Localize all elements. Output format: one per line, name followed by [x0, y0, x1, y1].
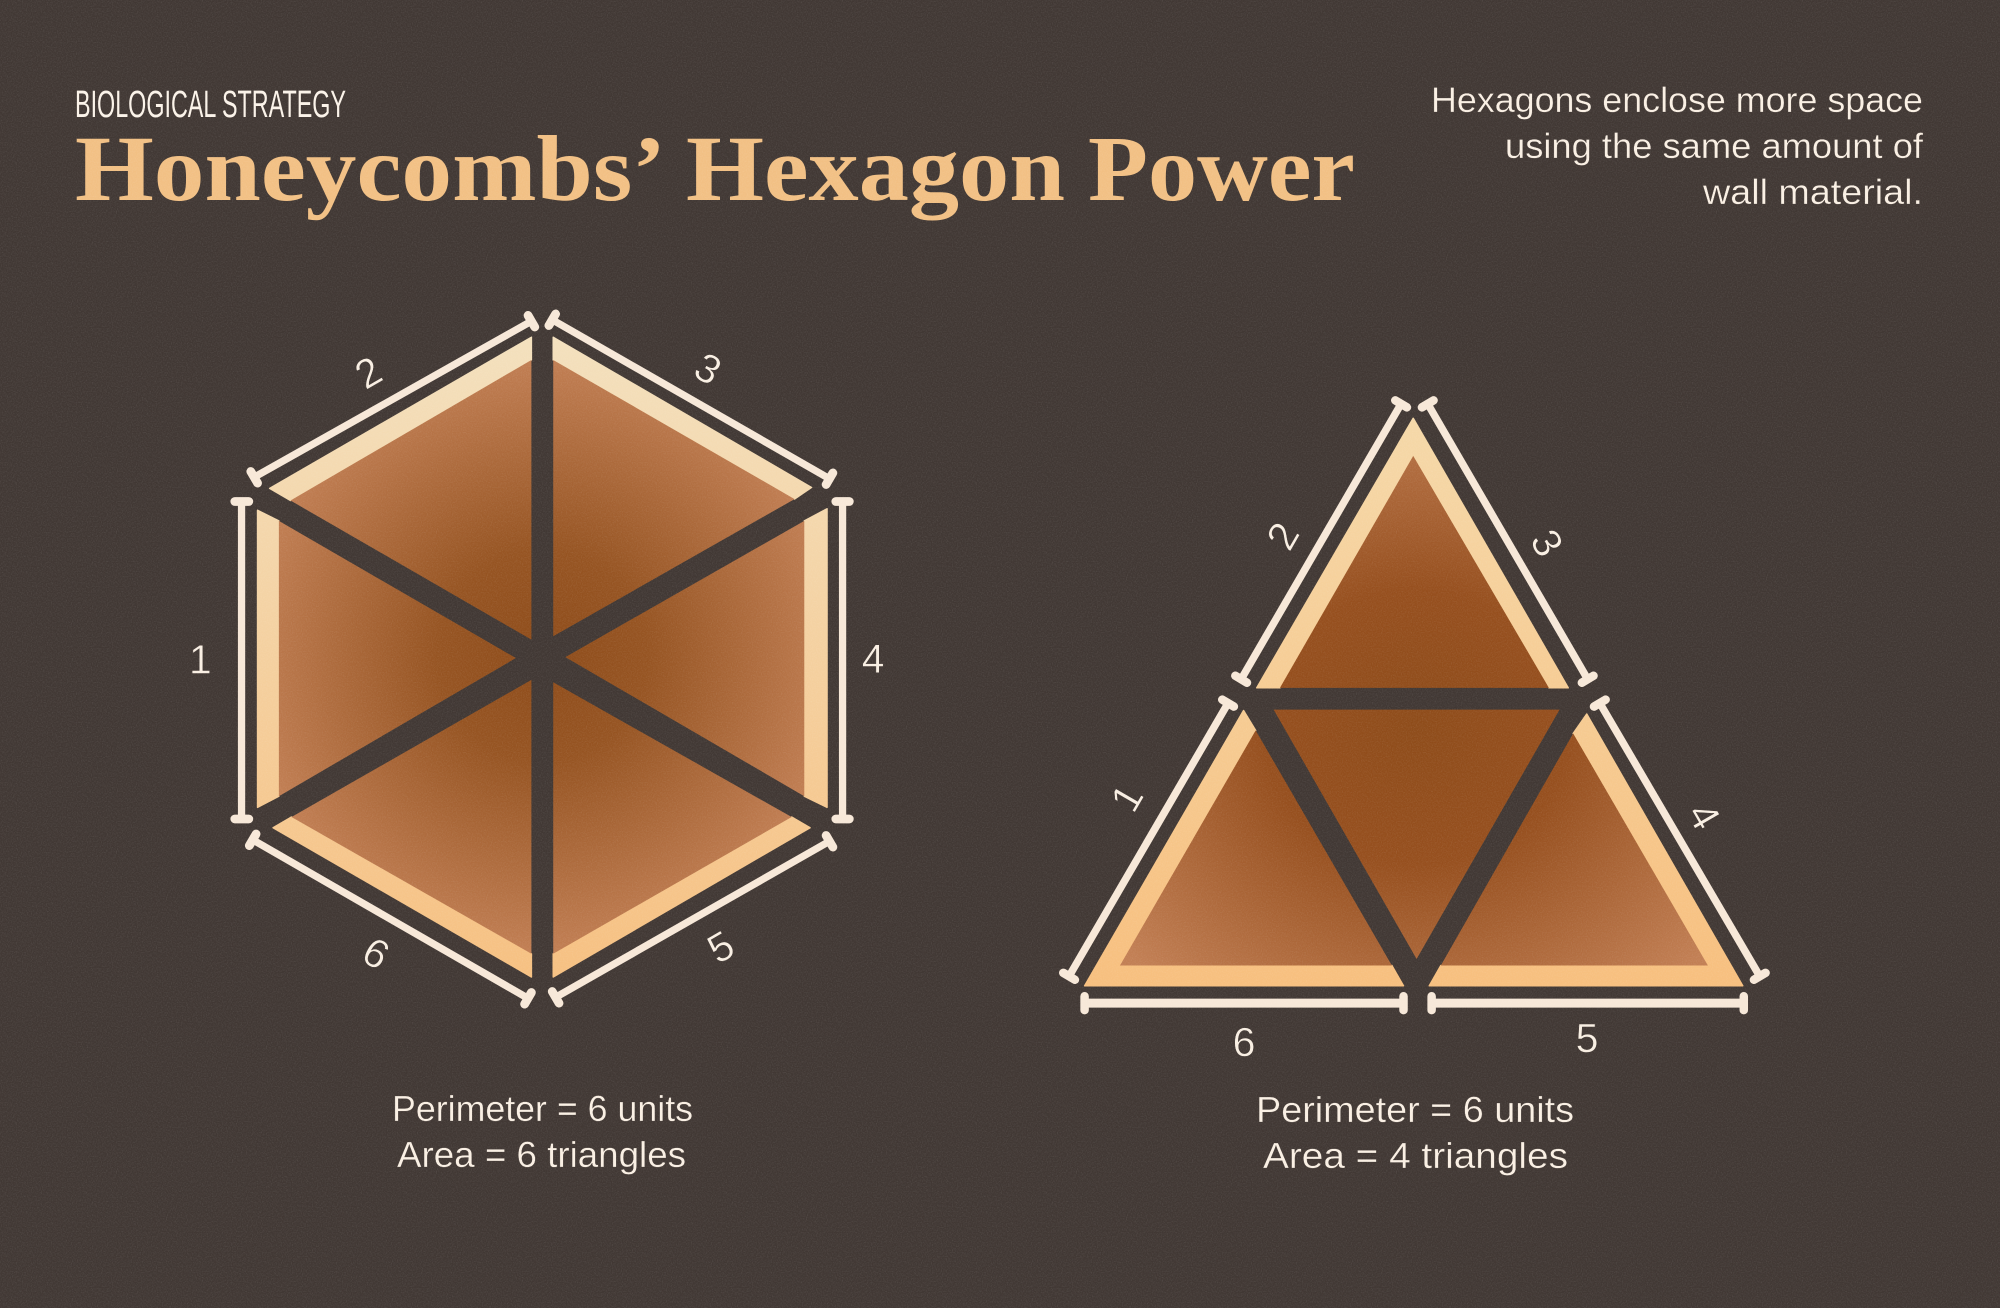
hexagon side numbers [189, 343, 884, 979]
hexagon caption: Perimeter = 6 units [392, 1088, 693, 1129]
hexagon side numbers: 6 [355, 928, 397, 979]
title: Hexagon [686, 118, 1065, 221]
hexagon caption: Area = 6 triangles [397, 1134, 686, 1175]
triangle caption: Perimeter = 6 units [1256, 1089, 1574, 1130]
triangle side numbers: 5 [1576, 1015, 1598, 1061]
triangle side numbers: 3 [1521, 522, 1573, 564]
triangle side numbers: 6 [1233, 1019, 1255, 1065]
title: Power [1088, 118, 1355, 221]
hexagon triangle wedges [258, 337, 827, 977]
description text: using the same amount of [1505, 127, 1923, 166]
hexagon side numbers: 5 [699, 921, 742, 972]
triangle diagram [1063, 400, 1766, 1010]
triangle caption [1256, 1089, 1574, 1176]
title: Honeycombs’ [75, 118, 666, 221]
description text [1431, 81, 1923, 212]
hexagon side numbers: 3 [687, 343, 729, 394]
hexagon side numbers: 2 [347, 347, 390, 398]
hexagon side numbers: 4 [862, 636, 884, 682]
triangle side numbers: 1 [1101, 777, 1153, 819]
triangle side numbers: 2 [1257, 515, 1309, 557]
hexagon diagram [189, 314, 884, 1004]
triangle fills [1085, 418, 1743, 986]
hexagon side measure bars [235, 314, 849, 1004]
description text: Hexagons enclose more space [1431, 81, 1923, 120]
triangle caption: Area = 4 triangles [1263, 1135, 1568, 1176]
triangle side numbers [1101, 515, 1730, 1065]
triangle side numbers: 4 [1678, 795, 1730, 837]
eyebrow heading: BIOLOGICAL STRATEGY [75, 84, 346, 126]
hexagon side numbers: 1 [189, 637, 212, 683]
hexagon caption [392, 1088, 693, 1175]
description text: wall material. [1702, 173, 1923, 212]
title [75, 118, 1355, 221]
triangle side measure bars [1063, 400, 1766, 1010]
